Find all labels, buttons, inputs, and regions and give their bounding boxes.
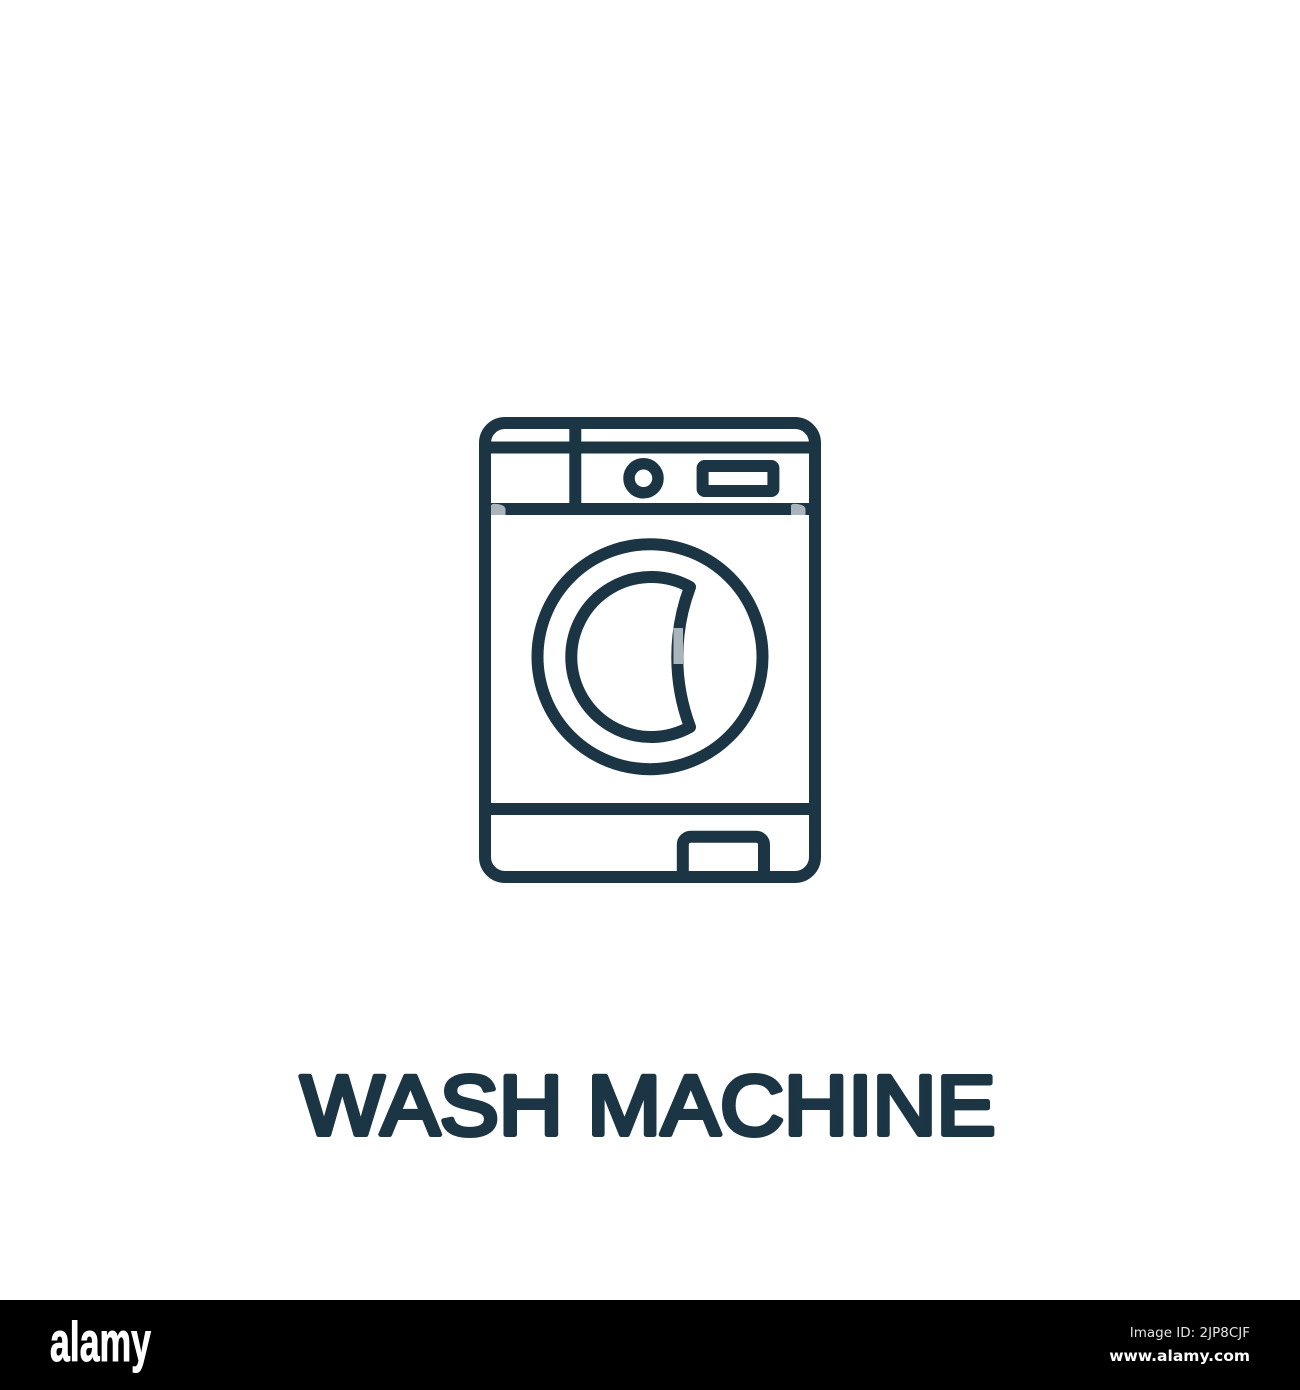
top panel upper divider	[485, 442, 815, 454]
control knob	[629, 464, 658, 493]
door glass crescent	[571, 577, 690, 737]
image id: Image ID: 2JP8CJF	[1130, 1325, 1250, 1341]
title: WASH MACHINE	[300, 1058, 995, 1152]
door outer ring	[538, 544, 762, 769]
footer bar	[0, 1300, 1300, 1390]
top panel lower divider	[485, 503, 815, 515]
bottom panel divider	[485, 803, 815, 815]
filter hatch	[683, 837, 764, 877]
display window	[703, 466, 773, 491]
footer logo: alamy: alamy	[50, 1310, 151, 1373]
detergent drawer divider	[569, 423, 581, 509]
website url: www.alamy.com	[1109, 1347, 1250, 1365]
machine body outline	[485, 423, 815, 877]
watermark fragments on icon	[491, 504, 806, 664]
icon: washing machine	[485, 423, 815, 877]
